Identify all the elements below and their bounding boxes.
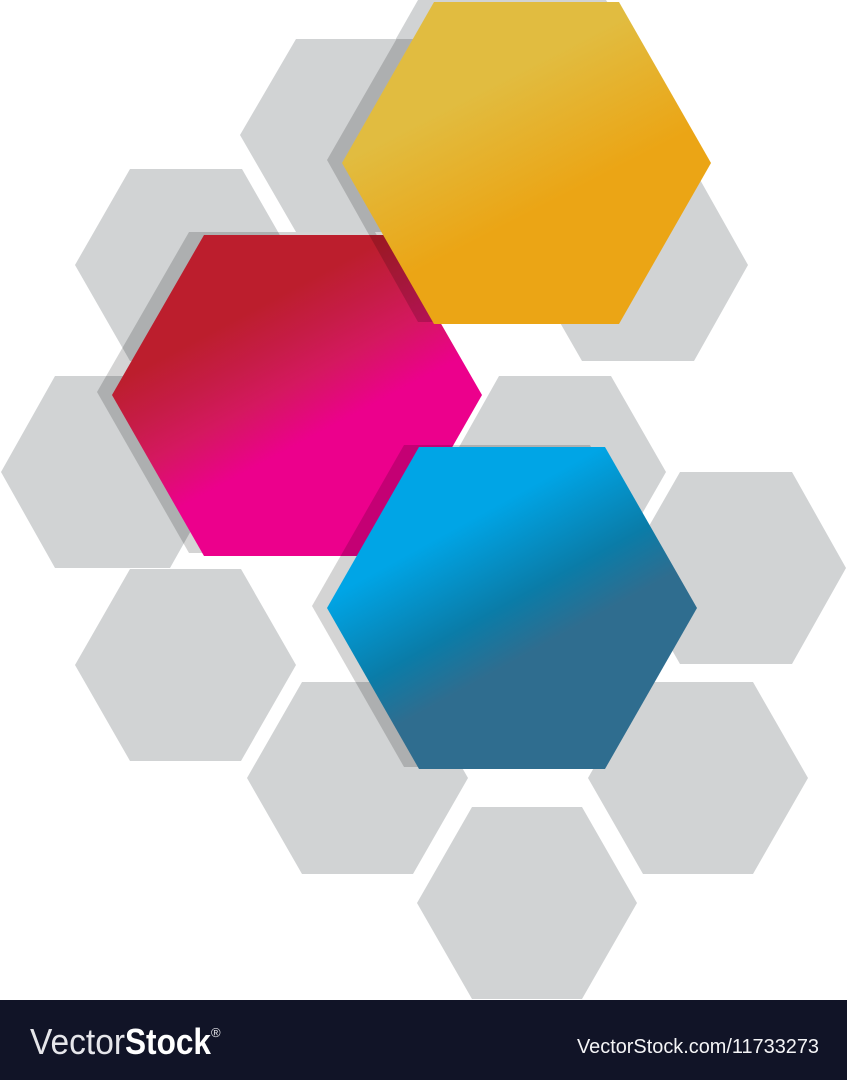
yellow hexagon shadow [327,39,500,322]
magenta hexagon [112,235,482,556]
footer bar [0,1000,847,1080]
watermark logo text: ® [211,1025,221,1040]
magenta hexagon shadow [97,232,467,553]
image id text: VectorStock.com/11733273 [577,1036,819,1058]
watermark logo text: VectorStock [30,1021,223,1062]
blue hexagon [327,447,697,769]
blue hexagon shadow [312,445,682,767]
yellow hexagon [342,2,711,324]
